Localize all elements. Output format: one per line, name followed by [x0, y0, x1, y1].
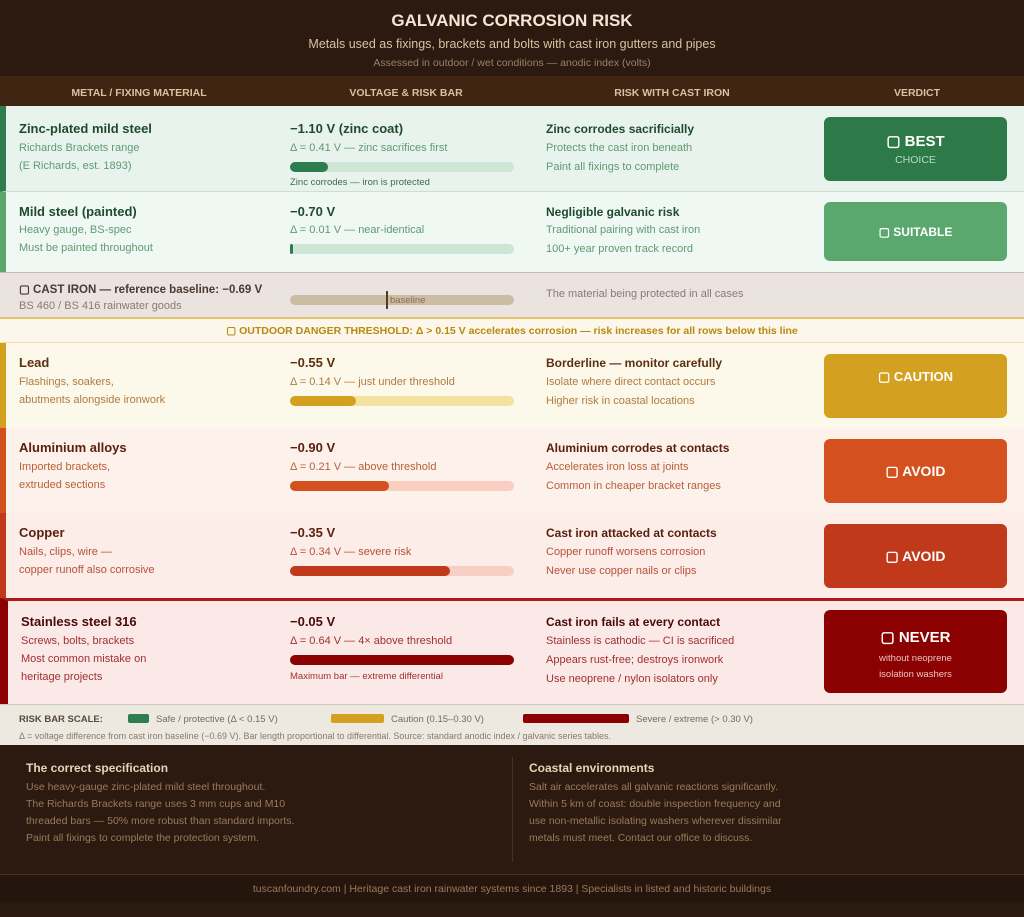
row: zinc-plated: Δ = 0.41 V — zinc sacrifices first: [290, 142, 447, 154]
row: copper: −0.35 V: [290, 525, 335, 540]
footer bar: [0, 874, 1024, 902]
verdict: never: [824, 610, 1007, 693]
row: copper: Δ = 0.34 V — severe risk: [290, 546, 411, 558]
verdict: avoid copper: ▢ AVOID: [886, 548, 945, 564]
header: Assessed in outdoor / wet conditions — anodic index (volts): [373, 57, 651, 69]
row: copper: copper runoff also corrosive: [19, 564, 155, 576]
row: stainless steel: Use neoprene / nylon isolators only: [546, 673, 718, 685]
panel: coastal environments: metals must meet. Contact our office to discuss.: [529, 832, 752, 844]
legend: Safe / protective (Δ < 0.15 V): [156, 714, 278, 725]
row: lead: Lead: [19, 355, 49, 370]
row: mild steel: [0, 192, 1024, 272]
row: aluminium: −0.90 V: [290, 440, 335, 455]
row: copper: Copper: [19, 525, 64, 540]
column headers: [0, 76, 1024, 106]
panel: correct specification: Use heavy-gauge zinc-plated mild steel throughout.: [26, 781, 265, 793]
row: copper: [0, 513, 1024, 598]
verdict: avoid copper: [824, 524, 1007, 588]
row: stainless steel: Stainless is cathodic — CI is sacrificed: [546, 635, 734, 647]
verdict: best: CHOICE: [895, 154, 936, 166]
legend: RISK BAR SCALE:: [19, 714, 103, 725]
row: zinc-plated: (E Richards, est. 1893): [19, 160, 132, 172]
row: lead: −0.55 V: [290, 355, 335, 370]
row: zinc-plated: Zinc-plated mild steel: [19, 121, 152, 136]
row: zinc-plated: −1.10 V (zinc coat): [290, 121, 403, 136]
verdict: never: ▢ NEVER: [880, 629, 951, 646]
row: cast iron baseline: [0, 272, 1024, 317]
row: aluminium: [0, 428, 1024, 513]
row: stainless steel: [0, 598, 1024, 704]
row: zinc-plated: Richards Brackets range: [19, 142, 139, 154]
panel: correct specification: The Richards Brackets range uses 3 mm cups and M10: [26, 798, 285, 810]
row: mild steel: Heavy gauge, BS-spec: [19, 224, 132, 236]
danger threshold banner: [0, 317, 1024, 343]
column headers: VOLTAGE & RISK BAR: [349, 87, 463, 99]
panel: coastal environments: Salt air accelerates all galvanic reactions significantly.: [529, 781, 778, 793]
verdict: caution: ▢ CAUTION: [878, 369, 953, 384]
panel: coastal environments: use non-metallic isolating washers wherever dissimilar: [529, 815, 782, 827]
row: aluminium: Aluminium corrodes at contacts: [546, 441, 729, 455]
verdict: never: without neoprene: [879, 653, 952, 664]
row: mild steel: −0.70 V: [290, 204, 335, 219]
row: cast iron baseline: The material being protected in all cases: [546, 288, 744, 300]
row: aluminium: Δ = 0.21 V — above threshold: [290, 461, 436, 473]
title: GALVANIC CORROSION RISK: [391, 11, 633, 30]
row: zinc-plated: Paint all fixings to complete: [546, 161, 679, 173]
verdict: caution: [824, 354, 1007, 418]
panel: coastal environments: Coastal environments: [529, 761, 654, 775]
row: cast iron baseline: ▢ CAST IRON — reference baseline: −0.69 V: [19, 284, 262, 296]
panel: correct specification: threaded bars — 50% more robust than standard imports.: [26, 815, 294, 827]
row: stainless steel: −0.05 V: [290, 614, 335, 629]
row: aluminium: extruded sections: [19, 479, 105, 491]
row: copper: Never use copper nails or clips: [546, 565, 696, 577]
row: mild steel: Mild steel (painted): [19, 204, 137, 219]
row: lead: abutments alongside ironwork: [19, 394, 165, 406]
row: lead: [0, 343, 1024, 428]
footer bar: tuscanfoundry.com | Heritage cast iron rainwater systems since 1893 | Specialists in listed and historic buildings: [253, 883, 771, 895]
row: cast iron baseline: baseline: [390, 295, 425, 306]
row: copper: Copper runoff worsens corrosion: [546, 546, 705, 558]
row: mild steel: Must be painted throughout: [19, 242, 153, 254]
panel: correct specification: The correct specification: [26, 761, 168, 775]
legend: Caution (0.15–0.30 V): [391, 714, 484, 725]
row: stainless steel: Most common mistake on: [21, 653, 146, 665]
panel: coastal environments: [529, 761, 782, 844]
column headers: VERDICT: [894, 87, 940, 99]
row: lead: Flashings, soakers,: [19, 376, 114, 388]
header: [0, 0, 1024, 76]
row: copper: Cast iron attacked at contacts: [546, 526, 717, 540]
row: lead: Higher risk in coastal locations: [546, 395, 695, 407]
verdict: avoid: ▢ AVOID: [886, 463, 945, 479]
verdict: suitable: [824, 202, 1007, 261]
row: stainless steel: Cast iron fails at every contact: [546, 615, 720, 629]
row: aluminium: Common in cheaper bracket ranges: [546, 480, 721, 492]
row: zinc-plated: Zinc corrodes — iron is protected: [290, 177, 430, 188]
panel: correct specification: Paint all fixings to complete the protection system.: [26, 832, 259, 844]
row: stainless steel: Δ = 0.64 V — 4× above threshold: [290, 635, 452, 647]
row: stainless steel: Maximum bar — extreme differential: [290, 671, 443, 682]
row: copper: Nails, clips, wire —: [19, 546, 112, 558]
column headers: RISK WITH CAST IRON: [614, 87, 730, 99]
legend: Severe / extreme (> 0.30 V): [636, 714, 753, 725]
subtitle: Metals used as fixings, brackets and bolts with cast iron gutters and pipes: [308, 37, 716, 51]
row: zinc-plated: [0, 106, 1024, 192]
row: stainless steel: Screws, bolts, brackets: [21, 635, 134, 647]
footer panels: [0, 745, 1024, 874]
row: aluminium: Imported brackets,: [19, 461, 110, 473]
column headers: METAL / FIXING MATERIAL: [71, 87, 207, 99]
row: cast iron baseline: BS 460 / BS 416 rainwater goods: [19, 300, 182, 312]
row: lead: Borderline — monitor carefully: [546, 356, 722, 370]
row: aluminium: Accelerates iron loss at joints: [546, 461, 688, 473]
row: mild steel: 100+ year proven track record: [546, 243, 693, 255]
row: mild steel: Traditional pairing with cast iron: [546, 224, 700, 236]
row: mild steel: Δ = 0.01 V — near-identical: [290, 224, 424, 236]
verdict: best: [824, 117, 1007, 181]
verdict: best: ▢ BEST: [886, 133, 945, 150]
row: lead: Δ = 0.14 V — just under threshold: [290, 376, 455, 388]
verdict: avoid: [824, 439, 1007, 503]
row: zinc-plated: Zinc corrodes sacrificially: [546, 122, 694, 136]
row: stainless steel: Stainless steel 316: [21, 614, 137, 629]
row: mild steel: Negligible galvanic risk: [546, 205, 679, 219]
verdict: suitable: ▢ SUITABLE: [879, 225, 952, 239]
panel: coastal environments: Within 5 km of coast: double inspection frequency and: [529, 798, 781, 810]
row: stainless steel: heritage projects: [21, 671, 102, 683]
row: stainless steel: Appears rust-free; destroys ironwork: [546, 654, 723, 666]
row: lead: Isolate where direct contact occurs: [546, 376, 715, 388]
row: zinc-plated: Protects the cast iron beneath: [546, 142, 692, 154]
verdict: never: isolation washers: [879, 669, 952, 680]
legend: Δ = voltage difference from cast iron baseline (−0.69 V). Bar length proportional to differential. Source: standard anodic index / galvanic series tables.: [19, 731, 611, 741]
row: aluminium: Aluminium alloys: [19, 440, 127, 455]
legend: [0, 704, 1024, 745]
danger threshold banner: ▢ OUTDOOR DANGER THRESHOLD: Δ > 0.15 V accelerates corrosion — risk increases for all rows below this line: [226, 325, 798, 337]
panel: correct specification: [26, 761, 294, 844]
